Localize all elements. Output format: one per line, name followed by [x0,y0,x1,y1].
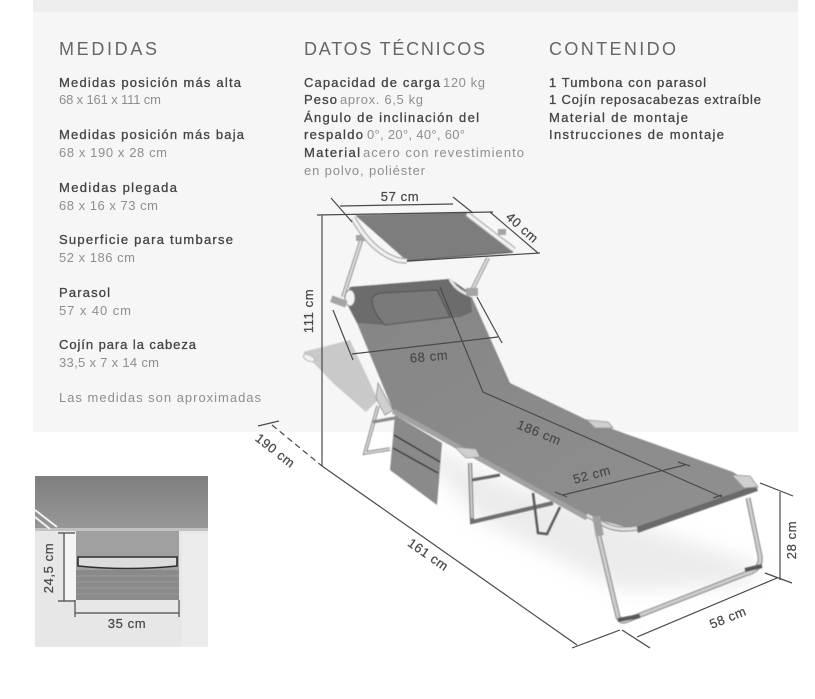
head-end legs [365,406,395,453]
note: Las medidas son aproximadas [59,390,262,405]
text: material: acero con revestimiento [363,145,524,160]
text: peso: aprox. 6,5 kg [340,92,423,107]
inset: pocket detail [35,476,208,647]
background panel [33,12,798,432]
text block: parasol [59,285,131,318]
side pocket [390,415,442,505]
text: ángulo: Ángulo de inclinación del [304,110,479,125]
pillow [372,290,450,325]
canopy struts [343,238,488,297]
floor shadow [400,430,760,590]
text block: superficie [59,232,233,265]
text block: posición más alta: Medidas posición más alta [59,75,242,90]
canopy [353,212,514,261]
contents list [549,75,761,142]
dimension labels: 57 cm [381,189,419,204]
text block: cojín [59,337,197,370]
dimension labels: 40 cm [503,209,542,246]
text block: cojín: 33,5 x 7 x 14 cm [59,355,159,370]
seat side frame [393,411,587,518]
text: ángulo [304,110,479,142]
dimension lines [258,197,793,648]
text: material: en polvo, poliéster [304,163,426,178]
text: ángulo: respaldo [304,127,363,142]
text block: plegada [59,180,178,213]
inset dimension lines [58,533,179,617]
inset labels: 24,5 cm [41,543,56,593]
text block: cojín: Cojín para la cabeza [59,337,197,352]
mid legs [470,463,553,522]
headrest [345,279,472,325]
hinges [330,229,506,307]
text: ángulo: 0°, 20°, 40°, 60° [367,127,465,142]
white gaps [65,533,76,600]
foot-end frame [587,498,762,621]
text block: plegada: 68 x 16 x 73 cm [59,198,158,213]
contents list: Instrucciones de montaje [549,127,724,142]
dimension labels: 52 cm [571,462,612,487]
text block: posición más alta [59,75,242,107]
inset labels [41,543,146,631]
heading: contenido: CONTENIDO [549,39,676,59]
seat fabric [350,279,757,530]
folded backrest shadow [303,340,378,412]
text block: parasol: 57 x 40 cm [59,303,131,318]
text block: superficie: Superficie para tumbarse [59,232,233,247]
dimension labels [252,189,799,632]
dimension labels: 186 cm [515,417,563,448]
text: capacidad: 120 kg [443,75,485,90]
column: contenido [549,39,761,142]
heading: medidas: MEDIDAS [59,39,157,59]
lounger illustration [302,212,762,621]
pocket [76,531,179,600]
text: material: Material [304,145,360,160]
text block: plegada: Medidas plegada [59,180,178,195]
text block: posición más baja [59,127,245,160]
frame plates [376,383,758,488]
column: medidas [59,39,262,405]
contents list: 1 Cojín reposacabezas extraíble [549,92,761,107]
strap [533,493,560,534]
text: capacidad: Capacidad de carga [304,75,441,90]
text: peso [304,92,423,107]
dimension labels: 190 cm [252,430,298,471]
text: peso: Peso [304,92,337,107]
column: datos técnicos [304,39,524,178]
inset labels: 35 cm [108,616,146,631]
text: material [304,145,524,178]
text block: posición más baja: 68 x 190 x 28 cm [59,145,167,160]
text block: parasol: Parasol [59,285,110,300]
text block: superficie: 52 x 186 cm [59,250,135,265]
dimension labels: 58 cm [707,603,748,632]
contents list: Material de montaje [549,110,688,125]
contents list: 1 Tumbona con parasol [549,75,706,90]
dimension labels: 111 cm [301,289,316,333]
dimension labels: 28 cm [784,521,799,559]
text block: posición más alta: 68 x 161 x 111 cm [59,92,161,107]
dimension labels: 161 cm [405,535,452,574]
heading: datos técnicos: DATOS TÉCNICOS [304,39,485,59]
inset seat fabric [35,476,208,528]
top band [33,0,798,12]
dimension labels: 68 cm [409,347,449,366]
text block: posición más baja: Medidas posición más baja [59,127,245,142]
